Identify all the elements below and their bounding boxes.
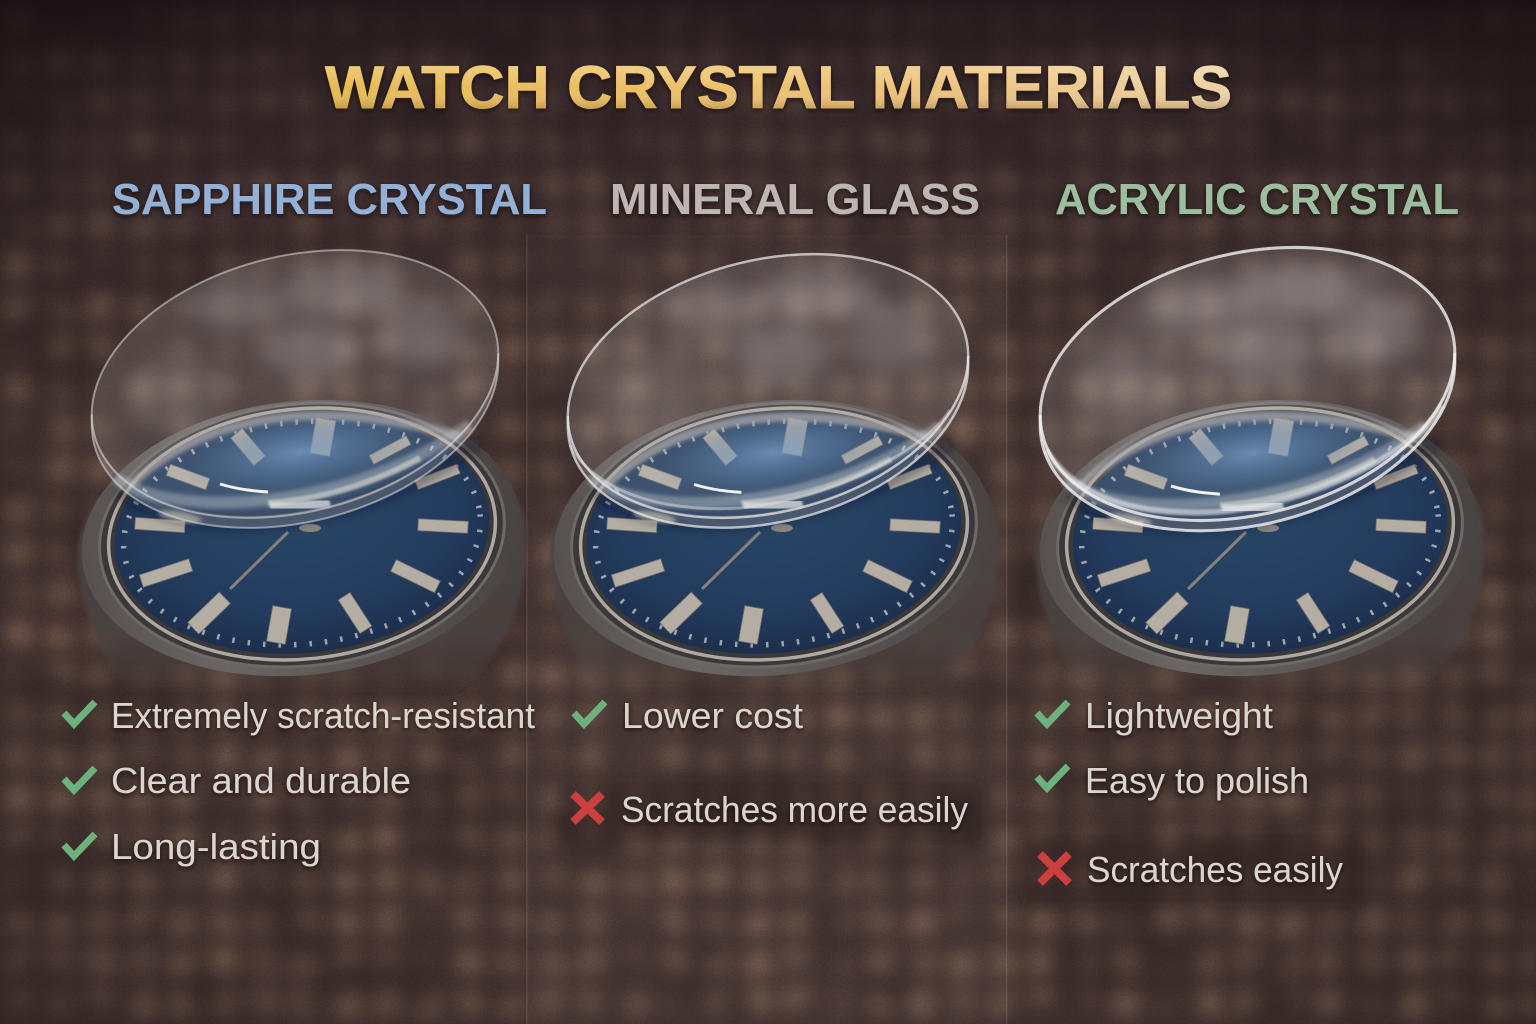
title: WATCH CRYSTAL MATERIALS — [325, 54, 1232, 121]
drawback: scratches more easily — [556, 782, 981, 844]
panel: acrylic crystal — [1011, 175, 1492, 902]
illustration: watch with mineral glass crystal — [540, 214, 1006, 697]
heading: acrylic crystal: ACRYLIC CRYSTAL — [1055, 175, 1459, 224]
benefit: easy to polish: Easy to polish — [1085, 760, 1309, 801]
panel divider: center column overlay — [526, 235, 1008, 1024]
drawback: scratches easily — [1024, 834, 1364, 902]
benefit: lightweight: Lightweight — [1085, 695, 1273, 736]
title: WATCH CRYSTAL MATERIALS — [325, 54, 1232, 121]
benefit: long-lasting: Long-lasting — [111, 826, 321, 867]
drawback: scratches more easily: Scratches more easily — [621, 789, 968, 830]
panel: mineral glass — [540, 175, 1006, 844]
panel: sapphire crystal — [63, 175, 547, 867]
benefit: lower cost: Lower cost — [622, 695, 803, 736]
heading: sapphire crystal: SAPPHIRE CRYSTAL — [112, 175, 547, 224]
benefit: clear and durable: Clear and durable — [111, 760, 411, 801]
drawback: scratches easily: Scratches easily — [1087, 849, 1343, 890]
illustration: watch with acrylic crystal — [1011, 206, 1492, 697]
illustration: watch with sapphire crystal — [63, 210, 534, 697]
heading: mineral glass: MINERAL GLASS — [610, 175, 980, 224]
benefit: extremely scratch-resistant: Extremely scratch-resistant — [111, 695, 535, 736]
